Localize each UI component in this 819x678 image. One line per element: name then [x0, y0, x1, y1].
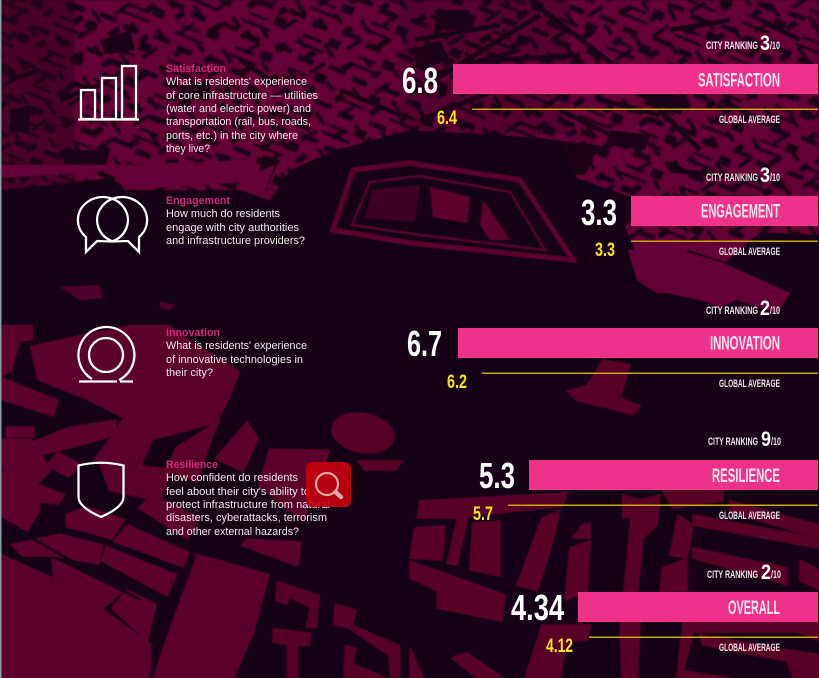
score bar — [458, 328, 818, 358]
city ranking: CITY RANKING — [707, 569, 758, 581]
global average label: GLOBAL AVERAGE — [719, 510, 780, 522]
text: engagement question: and infrastructure providers? — [166, 235, 305, 247]
city ranking — [706, 297, 780, 320]
city ranking: CITY RANKING — [706, 172, 758, 184]
text: engagement question — [166, 208, 305, 247]
score bar — [529, 460, 818, 490]
text: satisfaction question: transportation (rail, bus, roads, — [166, 116, 311, 128]
global average line — [508, 504, 818, 506]
global average line — [482, 372, 818, 374]
heading: Resilience: Resilience — [166, 459, 218, 471]
lower right blocks — [358, 360, 819, 678]
chart row: overall — [511, 561, 818, 657]
global average label: GLOBAL AVERAGE — [719, 114, 780, 126]
text: satisfaction question: of core infrastructure — utilities — [166, 90, 318, 102]
score value: 4.34 — [511, 587, 564, 628]
score bar — [453, 64, 818, 94]
text: innovation question: their city? — [166, 367, 213, 379]
global average label: GLOBAL AVERAGE — [719, 246, 780, 258]
text: satisfaction question: they live? — [166, 143, 210, 155]
text: innovation question: of innovative technologies in — [166, 354, 303, 366]
icon: overlapping speech bubbles — [78, 197, 147, 252]
city ranking: 3 — [760, 164, 770, 187]
city ranking: 9 — [761, 428, 771, 451]
text: resilience question: feel about their city's ability to — [166, 486, 310, 498]
score value: 6.8 — [402, 60, 438, 101]
text: resilience question: disasters, cyberattacks, terrorism — [166, 512, 327, 524]
text: satisfaction question: ports, etc.) in the city where — [166, 130, 298, 142]
bar label: OVERALL — [728, 598, 780, 619]
city ranking: 2 — [760, 297, 770, 320]
global average label: GLOBAL AVERAGE — [719, 378, 780, 390]
score value: 6.7 — [407, 323, 442, 364]
score value: 3.3 — [581, 192, 617, 233]
icon: concentric loop — [78, 327, 134, 382]
city ranking: 3 — [760, 32, 770, 55]
city ranking: /10 — [770, 305, 780, 317]
heading: Satisfaction: Satisfaction — [166, 63, 226, 75]
city ranking: /10 — [770, 40, 780, 52]
text: resilience question — [166, 472, 330, 538]
city ranking — [706, 32, 780, 55]
global average value: 6.2 — [447, 372, 467, 393]
heading: Engagement: Engagement — [166, 195, 230, 207]
chart row: engagement — [581, 164, 818, 261]
global average line — [589, 636, 818, 638]
text: satisfaction question: (water and electric power) and — [166, 103, 311, 115]
fortress — [333, 163, 573, 260]
city ranking: CITY RANKING — [708, 436, 758, 448]
city ranking — [708, 428, 781, 451]
panel: innovation description — [78, 327, 307, 382]
text: resilience question: and other external hazards? — [166, 526, 299, 538]
text: resilience question: How confident do residents — [166, 472, 298, 484]
global average value: 5.7 — [473, 504, 493, 525]
text: engagement question: engage with city authorities — [166, 222, 299, 234]
panel: engagement description — [78, 195, 305, 252]
city ranking: 2 — [761, 561, 771, 584]
heading: Innovation: Innovation — [166, 327, 220, 339]
global average line — [631, 240, 818, 242]
text: satisfaction question: What is residents' experience — [166, 76, 307, 88]
text: innovation question — [166, 340, 307, 379]
text: satisfaction question — [166, 76, 318, 155]
chart row: innovation — [407, 297, 818, 393]
text: engagement question: How much do residents — [166, 208, 280, 220]
global average label: GLOBAL AVERAGE — [719, 642, 780, 654]
icon: shield — [78, 463, 124, 517]
city ranking: CITY RANKING — [706, 305, 758, 317]
panel: resilience description — [78, 459, 330, 538]
panel: satisfaction description — [78, 63, 318, 155]
score value: 5.3 — [479, 455, 515, 496]
lower left blocks — [0, 338, 328, 678]
lower dark streets — [0, 520, 195, 678]
chart row: satisfaction — [402, 32, 818, 129]
chart row: resilience — [473, 428, 818, 525]
city ranking: /10 — [770, 172, 780, 184]
left edge rule — [0, 0, 2, 678]
global average value: 4.12 — [546, 636, 573, 657]
city ranking: /10 — [771, 569, 781, 581]
score bar — [631, 196, 818, 226]
city ranking — [707, 561, 781, 584]
city ranking — [706, 164, 780, 187]
text: innovation question: What is residents' experience — [166, 340, 307, 352]
text: resilience question: protect infrastructure from natural — [166, 499, 330, 511]
icon: search button — [306, 462, 351, 507]
global average value: 3.3 — [595, 240, 615, 261]
global average line — [472, 108, 818, 110]
icon: bar chart — [78, 66, 139, 120]
city ranking: /10 — [771, 436, 781, 448]
global average value: 6.4 — [437, 108, 457, 129]
city ranking: CITY RANKING — [706, 40, 758, 52]
score bar — [578, 592, 818, 622]
